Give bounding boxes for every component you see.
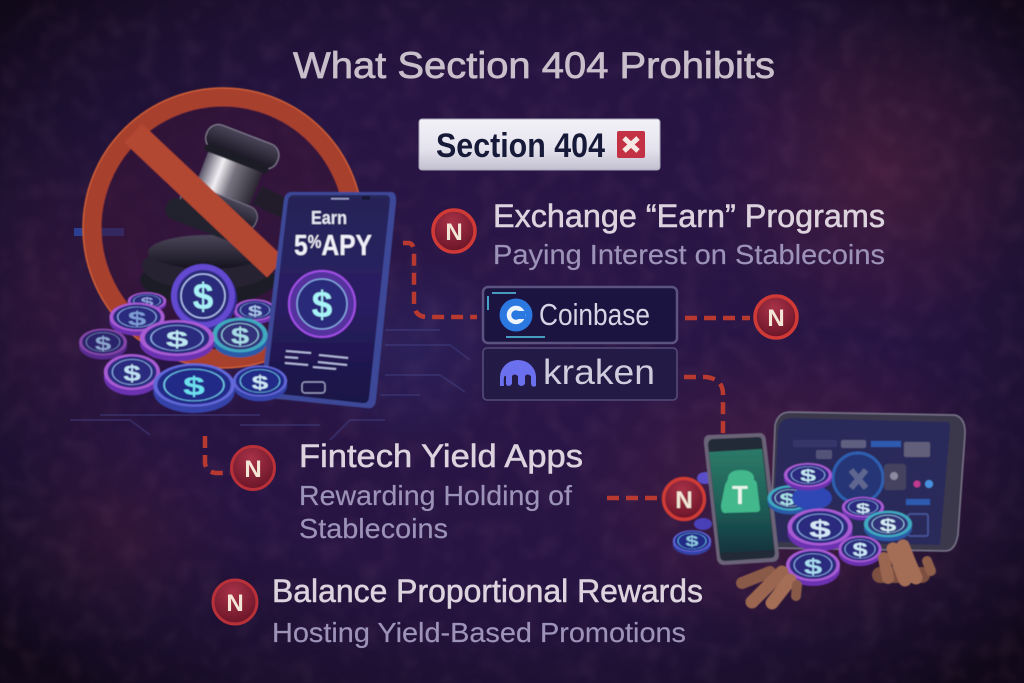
coin: rear left — [109, 303, 165, 336]
coin: right rear — [842, 497, 884, 520]
item: balance proportional rewards — [213, 573, 703, 648]
subheading: Paying Interest on Stablecoins — [493, 239, 885, 270]
coin: rear right: $ — [248, 303, 262, 320]
small coin left of phone: $ — [685, 533, 699, 550]
coin: lower right — [233, 365, 287, 401]
coin: front: $ — [183, 372, 205, 400]
coin: large upright — [171, 264, 237, 331]
coin: large upright: $ — [193, 276, 214, 317]
coin: right rear: $ — [856, 502, 871, 516]
coin: purple centre: $ — [166, 326, 188, 352]
coin: rear left: $ — [128, 308, 146, 329]
hand: right — [880, 546, 931, 580]
phone text: 5% APY: APY — [321, 230, 372, 262]
phone text: 5% APY: % — [308, 232, 321, 252]
N badge: fintech phone: N — [675, 487, 693, 514]
coin: teal right — [864, 511, 912, 541]
phone: green app — [704, 433, 779, 565]
title: What Section 404 Prohibits — [293, 45, 775, 86]
subheading: Hosting Yield-Based Promotions — [272, 617, 686, 648]
tablet — [770, 412, 965, 551]
N badge: coinbase: N — [767, 305, 785, 332]
coin: lower right — [838, 536, 882, 566]
coin: small rear: $ — [140, 295, 154, 309]
item: exchange earn programs — [433, 198, 885, 270]
connector: fintech left — [205, 436, 230, 473]
coin: teal behind — [768, 485, 812, 514]
connector: fintech to phone — [607, 496, 662, 500]
coin: centre large — [788, 508, 852, 551]
small coin left of phone — [673, 530, 711, 555]
circuit traces — [70, 330, 470, 440]
prohibition slash — [133, 133, 276, 268]
coinbase logo box: Coinbase — [539, 297, 650, 332]
icon: green lock with T: T — [732, 480, 748, 510]
coin: teal behind: $ — [779, 490, 795, 509]
connector: coinbase to N — [685, 316, 750, 320]
illustration: prohibition sign, gavel and coins — [79, 88, 396, 413]
coin: teal — [212, 318, 268, 358]
coin: far left — [79, 328, 127, 360]
connector: phone to coinbase — [403, 243, 477, 317]
connector: kraken to phone — [684, 377, 723, 436]
coinbase logo box — [483, 287, 677, 343]
icon: red x — [617, 131, 645, 158]
gavel — [140, 117, 298, 304]
coin: lower right: $ — [252, 372, 268, 394]
coin: teal: $ — [231, 324, 249, 350]
coin: rear right — [234, 299, 276, 324]
icon: N badge — [232, 446, 274, 490]
blue arrow behind ring — [74, 228, 124, 236]
phone text: earn: Earn — [311, 208, 347, 228]
coin: teal right: $ — [880, 516, 897, 535]
prohibition ring — [83, 88, 363, 368]
heading: Fintech Yield Apps — [299, 438, 583, 474]
coin: front: $ — [804, 555, 822, 579]
phone: earn 5% APY — [261, 192, 396, 408]
N badge: coinbase — [755, 296, 797, 338]
subheading: Rewarding Holding of — [299, 480, 572, 511]
coin stack top — [784, 463, 832, 510]
coin: lower left — [104, 354, 160, 395]
illustration: fintech devices and coins — [664, 412, 965, 603]
coin: front — [786, 549, 840, 586]
phone coin — [289, 271, 355, 337]
coin: small rear — [128, 292, 166, 312]
N badge: fintech phone — [664, 478, 704, 520]
coin stack behind phone — [694, 472, 713, 530]
phone coin: $ — [312, 284, 333, 325]
section 404 badge: Section 404 — [436, 127, 605, 165]
coin: lower left: $ — [123, 360, 141, 386]
heading: Balance Proportional Rewards — [272, 573, 703, 609]
icon: N badge — [213, 580, 257, 624]
phone lines — [285, 351, 348, 369]
section 404 badge — [419, 119, 660, 170]
subheading second line: Stablecoins — [299, 513, 448, 544]
coin: lower right: $ — [852, 540, 868, 560]
heading: Exchange “Earn” Programs — [493, 198, 885, 234]
kraken logo box — [483, 348, 677, 400]
icon: N badge: N — [244, 456, 262, 483]
icon: N badge — [433, 210, 475, 252]
icon: N badge: N — [226, 590, 244, 617]
coin: purple centre — [140, 320, 214, 361]
coin stack top: $ — [800, 466, 816, 485]
phone text: 5% APY: 5 — [294, 230, 310, 262]
kraken logo box: kraken — [543, 353, 655, 392]
icon: N badge: N — [445, 219, 463, 246]
coin: front — [153, 363, 235, 413]
item: fintech yield apps — [232, 438, 583, 544]
coin: centre large: $ — [809, 516, 831, 542]
hand: left — [742, 572, 797, 603]
coin: far left: $ — [95, 334, 111, 355]
